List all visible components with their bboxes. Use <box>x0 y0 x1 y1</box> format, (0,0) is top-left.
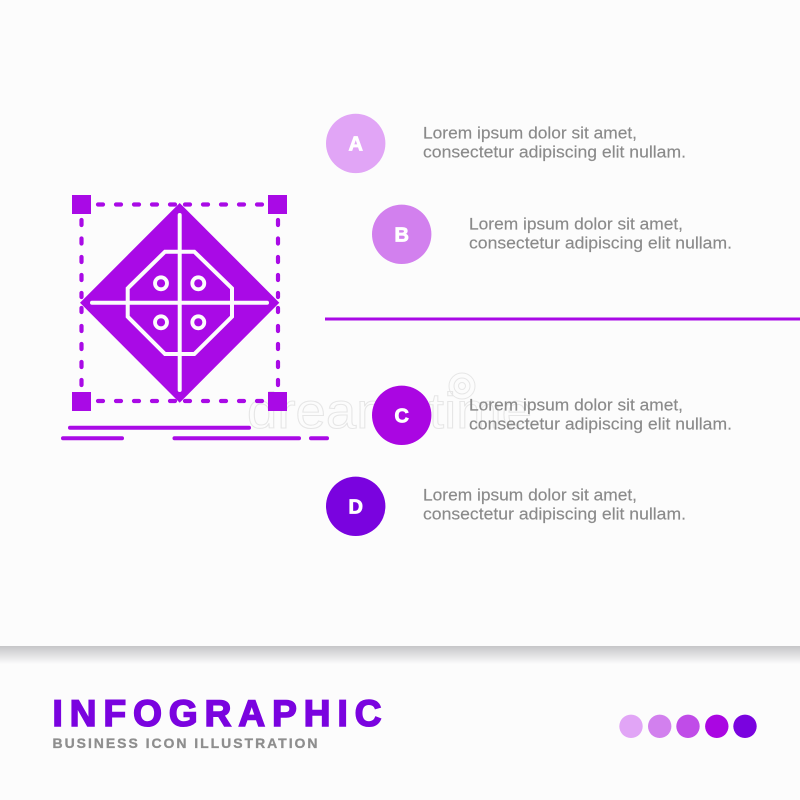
main icon: diamond in dashed selection frame <box>63 195 327 438</box>
text C: consectetur adipiscing elit nullam. <box>469 414 732 434</box>
text A: Lorem ipsum dolor sit amet, <box>423 124 637 142</box>
badge C <box>372 386 431 445</box>
badge A <box>326 114 385 173</box>
text D: consectetur adipiscing elit nullam. <box>423 504 686 524</box>
badge B <box>372 205 431 264</box>
octagon <box>128 252 232 354</box>
text C: Lorem ipsum dolor sit amet, <box>469 396 683 414</box>
text D: Lorem ipsum dolor sit amet, <box>423 486 637 504</box>
text D <box>423 486 686 524</box>
badge D <box>326 477 385 536</box>
footer colour dots <box>619 715 757 738</box>
footer shadow band <box>0 646 800 664</box>
badge D: D <box>348 496 363 518</box>
footer title: INFOGRAPHIC <box>52 693 382 734</box>
text B: Lorem ipsum dolor sit amet, <box>469 214 683 234</box>
divider line <box>325 318 800 320</box>
footer subtitle: BUSINESS ICON ILLUSTRATION <box>52 735 318 751</box>
badge A: A <box>348 134 363 156</box>
text B <box>469 214 732 252</box>
badge C: C <box>394 405 409 427</box>
item A <box>326 114 686 173</box>
item D <box>326 477 686 536</box>
text C <box>469 396 732 434</box>
crosshair <box>92 215 267 390</box>
dashed selection frame <box>82 204 278 401</box>
watermark: dreamstime <box>247 383 532 439</box>
text A: consectetur adipiscing elit nullam. <box>423 142 686 162</box>
diamond <box>80 203 279 403</box>
item B <box>372 205 732 264</box>
text A <box>423 124 686 162</box>
item C <box>372 386 732 445</box>
text B: consectetur adipiscing elit nullam. <box>469 234 732 252</box>
four rings <box>155 277 204 328</box>
corner handles <box>72 195 287 411</box>
ground lines <box>63 428 327 438</box>
badge B: B <box>394 224 409 246</box>
